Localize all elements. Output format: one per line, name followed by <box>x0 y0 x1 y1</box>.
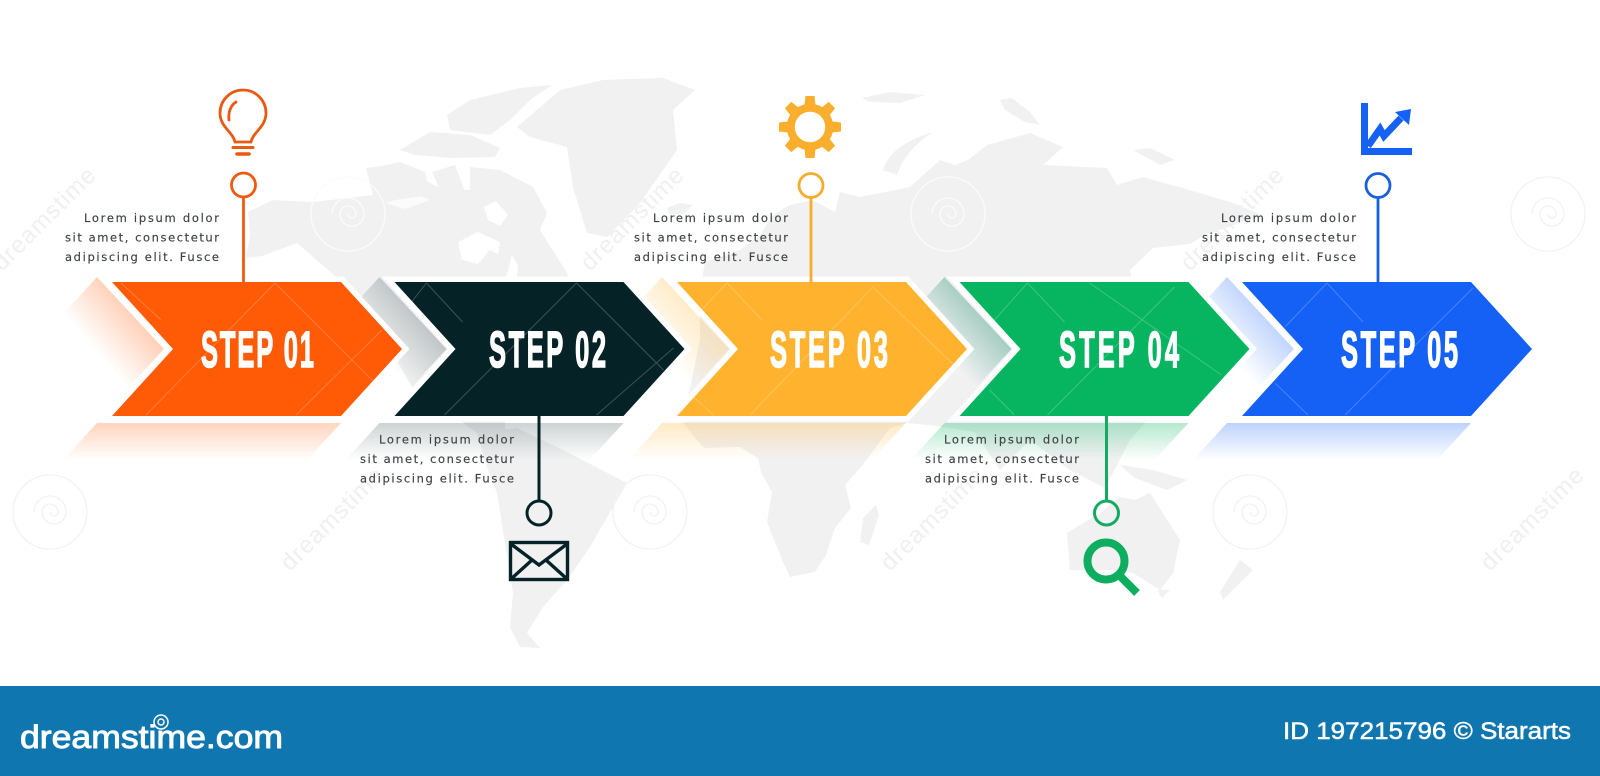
label: step 01: STEP 01 <box>201 321 314 378</box>
south america <box>477 428 627 648</box>
text block: step 01: sit amet, consectetur <box>65 230 219 244</box>
step 01 <box>65 90 402 416</box>
watermark text: dreamstime <box>875 461 990 576</box>
icon: light bulb <box>220 90 266 154</box>
text block: step 01: adipiscing elit. Fusce <box>65 250 219 264</box>
watermark text: dreamstime <box>1175 161 1290 276</box>
text block: step 01: Lorem ipsum dolor <box>84 211 219 225</box>
watermark text: dreamstime <box>1475 461 1590 576</box>
text block: step 04: Lorem ipsum dolor <box>944 432 1079 446</box>
watermark spirals <box>13 177 1585 549</box>
footer banner <box>0 686 1600 776</box>
text block: step 02: adipiscing elit. Fusce <box>360 472 514 486</box>
text block: step 05: Lorem ipsum dolor <box>1221 211 1356 225</box>
logo spiral <box>154 715 168 729</box>
north america <box>246 165 575 433</box>
icon: growth chart <box>1361 103 1412 155</box>
arrow: step 04 <box>960 282 1250 416</box>
text block: step 04: sit amet, consectetur <box>925 452 1079 466</box>
label: step 03: STEP 03 <box>770 321 888 378</box>
watermark text: dreamstime <box>275 461 390 576</box>
text block: step 03: adipiscing elit. Fusce <box>634 250 788 264</box>
step 03 <box>634 96 967 416</box>
australia and islands <box>1067 465 1253 600</box>
image id: ID 197215796 © Stararts <box>1283 718 1571 745</box>
arrow: step 05 <box>1242 282 1532 416</box>
connector: step 01 <box>232 173 256 283</box>
text block: step 05: adipiscing elit. Fusce <box>1202 250 1356 264</box>
label: step 05: STEP 05 <box>1341 321 1458 378</box>
text block: step 02: Lorem ipsum dolor <box>379 432 514 446</box>
connector: step 02 <box>527 415 551 525</box>
step 04 <box>925 282 1250 593</box>
text block: step 03: sit amet, consectetur <box>634 230 788 244</box>
arrow: step 01 <box>112 282 402 416</box>
hudson bay and channels <box>385 194 518 285</box>
text block: step 05: sit amet, consectetur <box>1202 230 1356 244</box>
arrow: step 03 <box>677 282 967 416</box>
text block: step 01 <box>65 211 219 264</box>
icon: envelope <box>510 542 568 580</box>
text block: step 05 <box>1202 211 1356 264</box>
text block: step 03 <box>634 211 788 264</box>
text block: step 02 <box>360 432 514 486</box>
icon: gear <box>779 96 841 158</box>
text block: step 04 <box>925 432 1079 486</box>
step 02 <box>360 282 684 580</box>
label: step 04: STEP 04 <box>1059 321 1179 378</box>
icon: magnifier <box>1088 542 1137 593</box>
watermark text: dreamstime <box>575 161 690 276</box>
africa <box>683 423 906 577</box>
logo text: dreamstime.com <box>20 719 283 755</box>
text block: step 03: Lorem ipsum dolor <box>653 211 788 225</box>
arrow: step 02 <box>394 282 684 416</box>
connector: step 05 <box>1366 174 1390 283</box>
novaya zemlya <box>883 132 933 175</box>
connector: step 03 <box>799 174 823 283</box>
greenland <box>517 78 695 237</box>
connector: step 04 <box>1094 415 1118 525</box>
arrow shadows and reflections <box>63 277 1471 460</box>
world map background <box>246 78 1262 648</box>
text block: step 02: sit amet, consectetur <box>360 452 514 466</box>
iceland and arctic specks <box>667 92 1175 215</box>
label: step 02: STEP 02 <box>489 321 606 378</box>
madagascar <box>860 505 879 545</box>
step 05 <box>1202 103 1532 416</box>
text block: step 04: adipiscing elit. Fusce <box>925 472 1079 486</box>
watermark text <box>0 161 1590 576</box>
arctic islands <box>372 85 552 200</box>
eurasia <box>683 133 1262 488</box>
